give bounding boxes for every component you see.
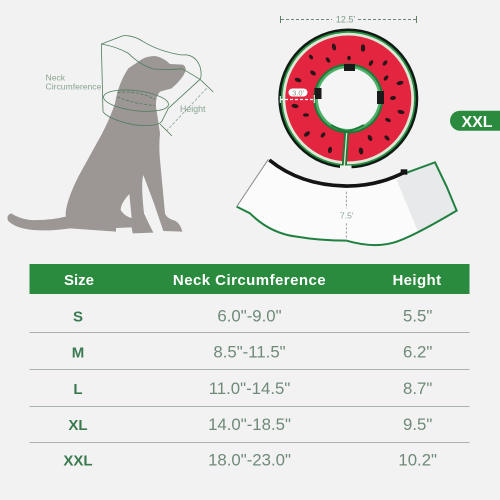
table rows: S xyxy=(73,308,83,326)
seam xyxy=(344,132,347,166)
size badge: XXL: XXL xyxy=(461,114,493,131)
table header: Height xyxy=(392,272,442,289)
dimension 3.0: 3.0' xyxy=(292,88,304,98)
width dimension 12.5 xyxy=(280,14,416,24)
table rows: XL xyxy=(68,417,88,434)
height line 7.5 xyxy=(345,192,348,241)
collar disc xyxy=(278,28,418,172)
dimension 3.0 xyxy=(280,88,314,103)
buckle xyxy=(401,169,407,175)
green edge xyxy=(237,162,457,245)
table rows: M xyxy=(72,344,84,362)
table header xyxy=(30,264,470,294)
label: height: Height xyxy=(180,104,206,114)
table rows: 9.5" xyxy=(403,415,432,434)
table rows: 6.2" xyxy=(403,342,432,362)
table rows: 18.0"-23.0" xyxy=(208,450,291,470)
black top rim xyxy=(269,160,405,186)
inner V xyxy=(331,125,364,132)
table rows: 5.5" xyxy=(403,306,432,326)
width dimension 12.5: 12.5' xyxy=(336,14,355,24)
table rows: 11.0"-14.5" xyxy=(209,379,290,398)
diagram: collar side view xyxy=(237,159,457,245)
diagram: watermelon collar top view xyxy=(278,14,418,172)
table rows: 8.5"-11.5" xyxy=(213,342,286,362)
table header: Size xyxy=(64,272,94,289)
dog silhouette xyxy=(7,56,186,233)
seeds xyxy=(291,43,405,155)
table rows: 14.0"-18.5" xyxy=(208,415,291,434)
cone outline xyxy=(101,36,213,136)
diagram: dog wearing cone xyxy=(7,36,213,233)
table header: Neck Circumference xyxy=(173,272,326,289)
table rows: L xyxy=(73,381,83,398)
gap at bottom xyxy=(340,166,352,172)
size table xyxy=(30,264,470,470)
table rows: 6.0"-9.0" xyxy=(217,306,282,326)
clips xyxy=(344,64,355,71)
table rows: XXL xyxy=(63,452,93,470)
collar body xyxy=(237,159,457,245)
table rows: 8.7" xyxy=(403,379,432,398)
diagram: collar side view: 7.5' xyxy=(340,210,354,220)
table rows xyxy=(30,306,470,470)
velcro flap xyxy=(397,162,457,232)
table rows: 10.2" xyxy=(398,450,437,470)
label: neck circumference: Neck xyxy=(46,72,66,82)
label: neck circumference: Circumference xyxy=(46,82,102,92)
neck circumference dashed arrows xyxy=(117,88,207,131)
size badge: XXL xyxy=(450,111,500,131)
